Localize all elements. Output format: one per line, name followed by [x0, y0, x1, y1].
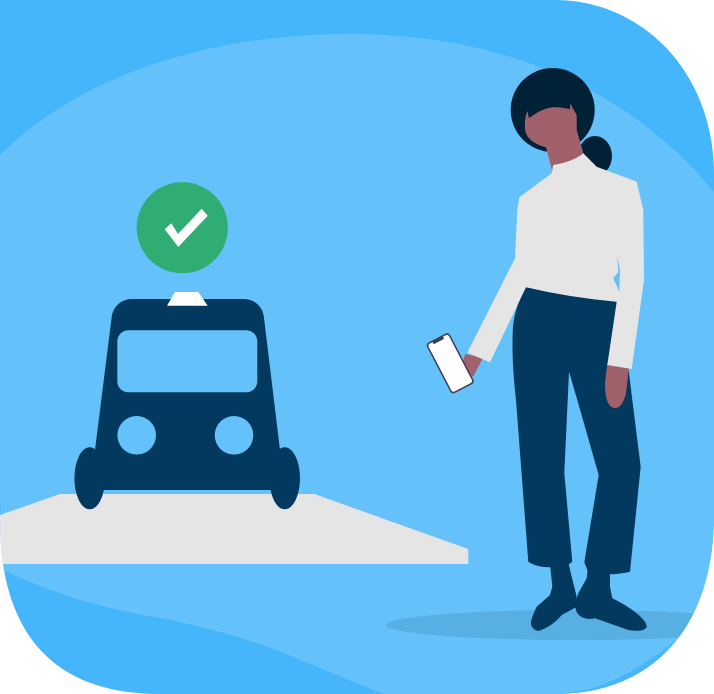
taxi windshield — [117, 330, 257, 392]
hair — [511, 68, 595, 152]
sweater — [467, 153, 644, 369]
icon: green check badge — [137, 182, 228, 273]
ground shadow — [386, 610, 714, 640]
right hand — [605, 363, 629, 408]
taxi roof light — [167, 292, 208, 306]
taxi headlights — [117, 416, 253, 455]
gap between sleeve and torso — [613, 256, 620, 292]
left hand — [462, 354, 483, 377]
road platform — [0, 494, 468, 564]
face and neck — [525, 103, 590, 175]
ponytail — [578, 136, 612, 176]
taxi body — [95, 299, 280, 490]
autonomous taxi — [74, 292, 300, 509]
shoes and ankles — [531, 562, 647, 631]
trousers — [512, 287, 641, 574]
woman looking at phone — [426, 68, 647, 631]
smartphone — [426, 332, 475, 395]
taxi wheels — [74, 447, 300, 509]
